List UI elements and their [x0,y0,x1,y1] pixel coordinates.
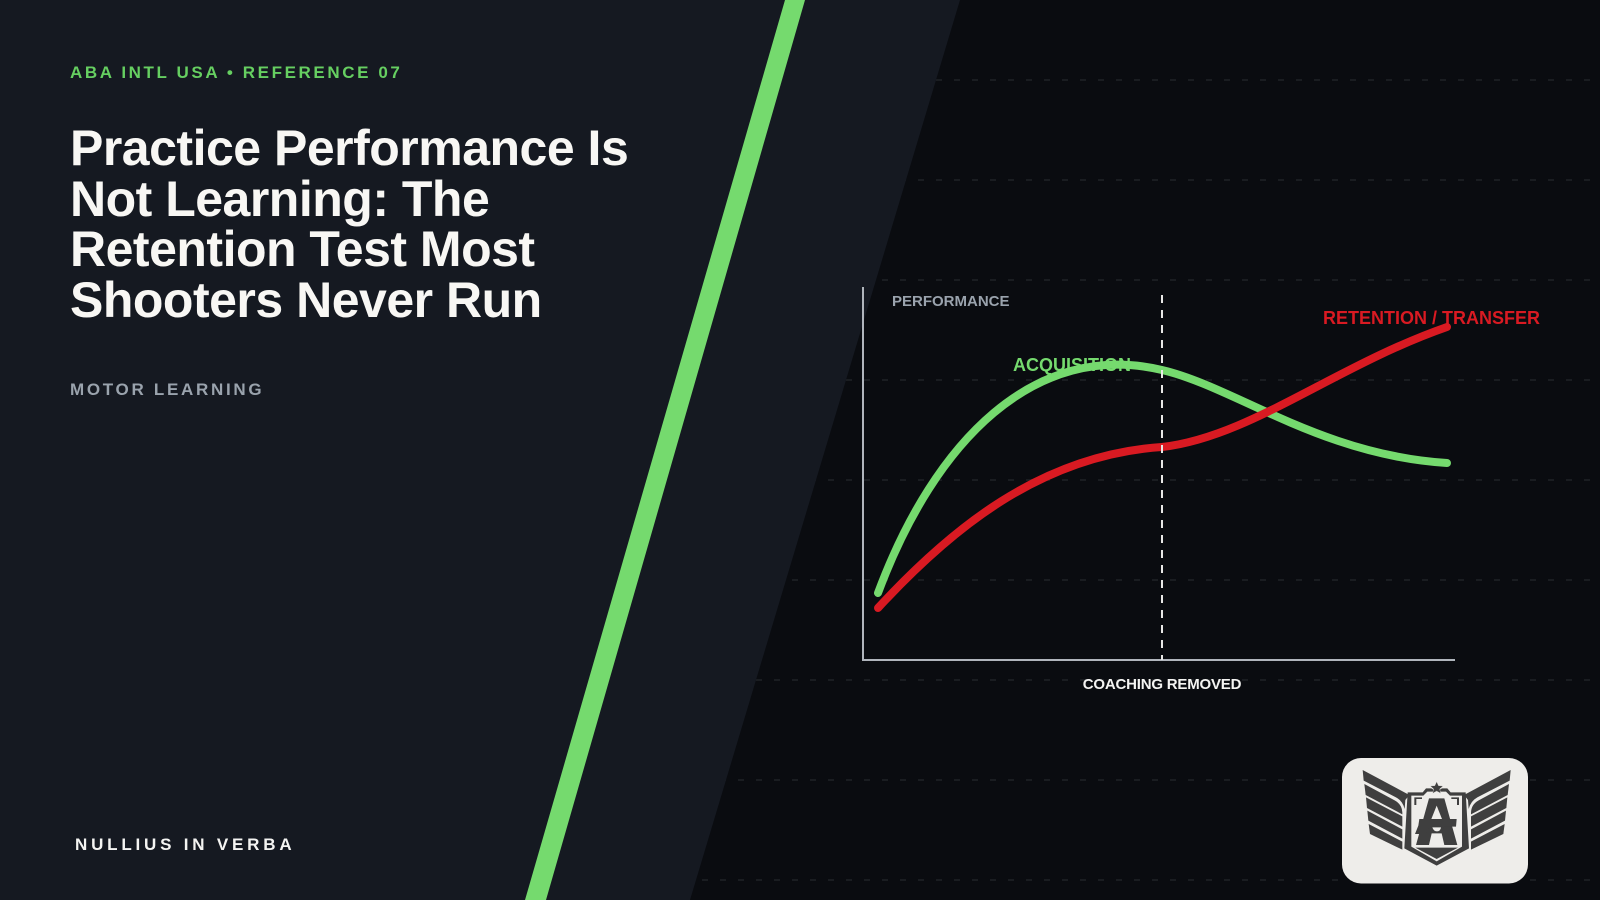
corner brackets [1414,797,1459,805]
coaching removed marker [1161,295,1163,660]
shield outline [1404,788,1469,866]
axes [863,287,1455,660]
x axis label: COACHING REMOVED [1083,676,1242,693]
right wing [1464,770,1511,850]
eyebrow: ABA INTL USA • REFERENCE 07 [70,63,402,82]
title [70,120,628,328]
title: Practice Performance Is [70,120,628,176]
trigger guard [1432,827,1441,831]
left wing [1363,770,1409,850]
title: Retention Test Most [70,221,535,277]
acquisition label: ACQUISITION [1013,355,1131,375]
star [1430,782,1443,793]
title: Not Learning: The [70,170,489,226]
axis label: PERFORMANCE [892,293,1010,310]
retention curve [878,327,1447,608]
base chevron [1415,848,1458,859]
footer motto: NULLIUS IN VERBA [75,835,295,854]
acquisition curve [878,365,1447,593]
letter A [1416,798,1457,845]
retention label: RETENTION / TRANSFER [1323,308,1540,328]
title: Shooters Never Run [70,272,542,328]
pistol [1415,819,1457,834]
subtitle: topic: MOTOR LEARNING [70,380,264,399]
